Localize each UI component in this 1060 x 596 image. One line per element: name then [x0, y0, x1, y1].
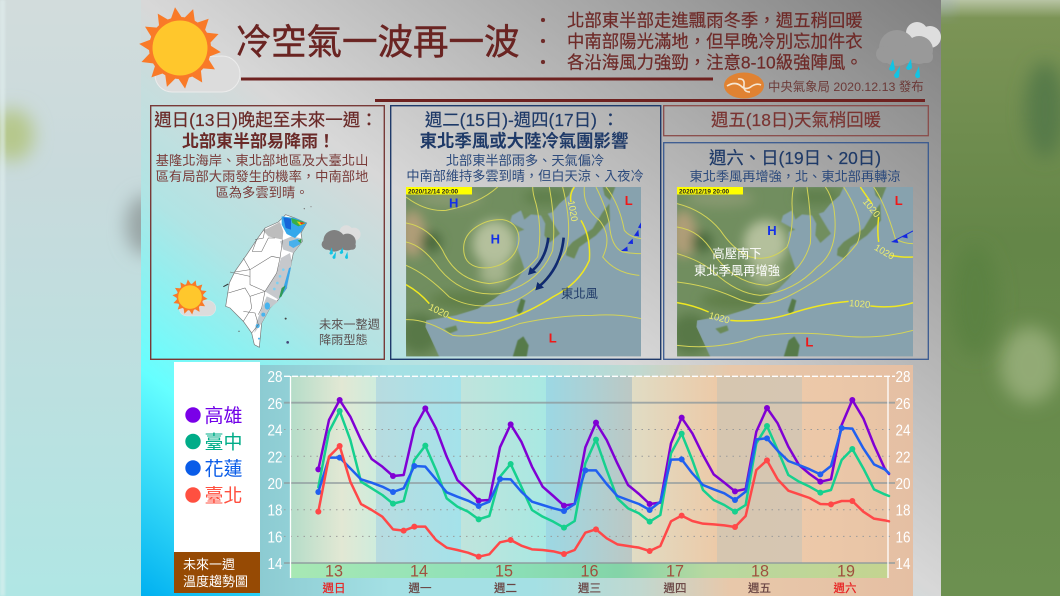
map: Taiwan rainfall pattern — [223, 206, 312, 347]
panel description: 北部東半部雨多、天氣偏冷 — [446, 153, 604, 168]
legend: Kaohsiung: 高雄 — [204, 405, 243, 427]
weather map: Dec 19 — [677, 187, 913, 356]
pressure labels on map: L — [549, 330, 557, 346]
title: 冷空氣一波再一波 — [236, 22, 520, 62]
weekday labels: 週一 — [408, 581, 432, 595]
panel heading: 週二(15日)-週四(17日) ： — [425, 110, 619, 130]
isobar value labels: 1020 — [849, 298, 871, 311]
background: blurred right strip — [936, 0, 1060, 596]
day bands — [290, 376, 888, 578]
panel: Friday warming — [664, 106, 928, 136]
panel heading: 東北季風或大陸冷氣團影響 — [420, 131, 628, 151]
panel description: 區為多雲到晴。 — [215, 185, 309, 200]
chart caption — [174, 552, 260, 593]
icon: small rain cloud — [322, 225, 361, 259]
title underline — [241, 78, 713, 80]
legend: Taipei — [185, 485, 243, 507]
isobar value labels — [427, 200, 579, 321]
isobar value labels: 1020 — [708, 310, 731, 327]
right temperature axis: 26 — [896, 396, 911, 413]
left temperature axis: 14 — [268, 556, 283, 573]
isobar value labels: 1020 — [565, 200, 579, 222]
date labels: 19 — [837, 562, 855, 580]
map annotation — [694, 246, 780, 278]
right temperature axis: 16 — [896, 530, 911, 546]
line: Kaohsiung temperature — [315, 397, 889, 509]
issuing agency and date: 中央氣象局 2020.12.13 發布 — [768, 79, 924, 94]
panel description: 區有局部大雨發生的機率，中南部地 — [156, 168, 368, 184]
map annotation: 高壓南下 — [712, 246, 762, 261]
chart caption: 未來一週 — [183, 557, 235, 572]
wind label: 東北風 — [561, 287, 598, 301]
left temperature axis: 20 — [268, 476, 283, 493]
weekday labels: 週二 — [494, 581, 517, 595]
panel: weekend monsoon — [664, 143, 928, 360]
pressure labels on map: L — [805, 334, 813, 350]
chart caption: 溫度趨勢圖 — [183, 574, 248, 589]
date labels: 14 — [410, 562, 428, 580]
map date stamp: 2020/12/14 20:00 — [408, 188, 459, 195]
header bullet list: 中南部陽光滿地，但早晚冷別忘加件衣 — [567, 32, 863, 52]
right temperature axis: 20 — [896, 476, 911, 493]
pressure labels on map — [767, 193, 903, 350]
icon: weather bureau logo — [724, 72, 764, 98]
background: blurred left strip — [0, 0, 166, 596]
icon: rain cloud — [876, 22, 941, 78]
map date stamp: 2020/12/19 20:00 — [679, 188, 730, 195]
panel description: 東北季風再增強，北、東北部再轉涼 — [690, 169, 900, 184]
date labels: 13 — [325, 562, 343, 580]
pressure labels on map: L — [895, 193, 903, 208]
front symbols — [891, 231, 913, 243]
chart: weekly temperature trend — [260, 365, 913, 596]
isobar value labels: 1020 — [860, 197, 882, 220]
left temperature axis: 28 — [268, 369, 283, 386]
legend: Taipei: 臺北 — [204, 485, 243, 507]
pressure labels on map: H — [449, 196, 458, 210]
map annotation: 東北季風再增強 — [694, 263, 780, 278]
header bullet list — [541, 10, 863, 72]
right temperature axis: 28 — [896, 369, 911, 386]
left temperature axis — [268, 369, 283, 573]
left temperature axis: 18 — [268, 502, 283, 520]
left temperature axis: 22 — [268, 450, 283, 466]
legend: Kaohsiung — [185, 405, 243, 427]
pressure labels on map: H — [491, 232, 500, 246]
icon: sun with cloud — [138, 6, 240, 92]
panel heading: 週六、日(19日、20日) — [709, 148, 881, 168]
date labels: 18 — [751, 562, 769, 580]
pressure labels on map: L — [625, 193, 633, 208]
panel: rainfall outlook — [151, 106, 384, 359]
wind arrows — [528, 238, 564, 290]
isobars — [677, 187, 913, 347]
isobar value labels: 1020 — [427, 302, 450, 321]
legend panel — [174, 362, 260, 593]
legend: Taichung — [185, 432, 243, 454]
main infographic panel — [141, 0, 941, 596]
weekday labels: 週四 — [664, 581, 686, 595]
pressure labels on map — [449, 193, 633, 346]
left temperature axis: 24 — [268, 422, 283, 440]
panel description — [406, 153, 644, 184]
isobar value labels — [708, 197, 896, 327]
legend: Hualien: 花蓮 — [204, 458, 243, 480]
isobar value labels: 1020 — [872, 242, 896, 262]
right temperature axis: 22 — [896, 450, 911, 466]
panel: Friday warming: 週五(18日)天氣稍回暖 — [711, 110, 881, 130]
header bullet list: 各沿海風力強勁，注意8-10級強陣風。 — [567, 52, 863, 72]
panel: Tue-Thu northeast monsoon — [391, 106, 661, 360]
legend: Taichung: 臺中 — [204, 432, 243, 454]
left temperature axis: 16 — [268, 530, 283, 546]
panel description: 基隆北海岸、東北部地區及大臺北山 — [156, 153, 368, 168]
header lower rule — [375, 99, 925, 102]
panel heading: 週日(13日)晚起至未來一週： — [154, 110, 378, 130]
line: Taichung temperature — [318, 408, 889, 531]
isobars — [406, 187, 641, 336]
line: Hualien temperature — [315, 425, 889, 514]
map caption: 未來一整週 — [319, 316, 380, 332]
header bullet list: 北部東半部走進飄雨冬季，週五稍回暖 — [567, 10, 863, 30]
panel description — [156, 153, 368, 200]
weekday labels: 週日 — [322, 581, 346, 595]
date labels: 17 — [666, 562, 684, 580]
legend: Hualien — [185, 458, 243, 480]
right temperature axis: 24 — [896, 422, 911, 440]
panel description: 中南部維持多雲到晴，但白天涼、入夜冷 — [406, 168, 644, 184]
panel heading: 北部東半部易降雨！ — [182, 131, 335, 151]
weekday labels: 週六 — [834, 581, 856, 595]
date labels: 16 — [580, 562, 598, 580]
map date stamp — [677, 187, 743, 195]
map date stamp — [406, 187, 472, 195]
weekday labels: 週五 — [748, 581, 771, 595]
line: Taipei temperature — [315, 443, 889, 560]
pressure labels on map: H — [767, 223, 777, 238]
right temperature axis: 14 — [896, 556, 911, 573]
map caption — [319, 316, 380, 347]
weekday labels — [322, 581, 856, 595]
panel heading — [420, 110, 628, 151]
left temperature axis: 26 — [268, 396, 283, 413]
date labels — [325, 562, 855, 580]
right temperature axis — [896, 369, 911, 573]
icon: small sun with cloud — [172, 279, 216, 316]
front symbols — [621, 222, 641, 251]
weekday labels: 週三 — [578, 581, 601, 595]
right temperature axis: 18 — [896, 502, 911, 520]
panel heading — [154, 110, 378, 151]
map caption: 降雨型態 — [319, 332, 368, 347]
weather map: Dec 14 — [406, 187, 641, 356]
date labels: 15 — [495, 562, 513, 580]
